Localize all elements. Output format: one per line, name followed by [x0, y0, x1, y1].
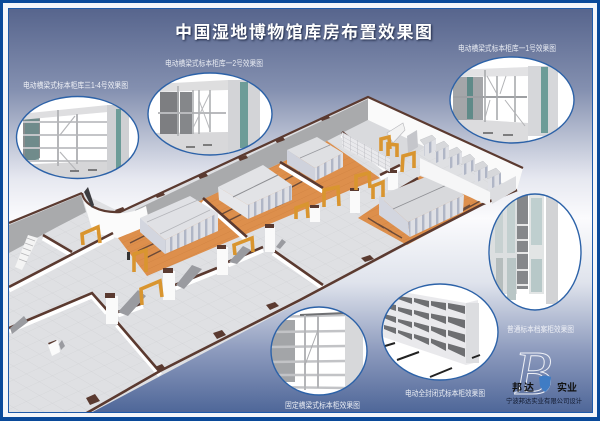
floor rails: [130, 172, 482, 258]
storage block 4: [379, 174, 464, 237]
callout: cabinet library 1: [450, 57, 574, 145]
storage block 2: [218, 165, 292, 219]
logo company name: 邦达: [512, 381, 536, 394]
doors: [82, 137, 414, 305]
logo designer line: 宁波邦达实业有限公司设计: [506, 396, 583, 405]
person: [127, 252, 130, 260]
pillar shadows: [10, 239, 286, 350]
caption: archive cabinet: 普通标本档案柜效果图: [507, 324, 574, 334]
caption: fixed cabinet: 固定横梁式标本柜效果图: [285, 400, 360, 410]
right white wall: [368, 97, 523, 190]
orange rooms floor: [118, 141, 380, 276]
storage block 1: [140, 196, 218, 254]
interior walls: [9, 132, 418, 375]
logo company type: 实业: [557, 381, 577, 394]
logo shield: [539, 376, 551, 392]
logo: [506, 340, 583, 408]
caption: cabinet 2: 电动横梁式标本柜库一2号效果图: [165, 58, 263, 68]
rear room floor: [344, 120, 384, 132]
title: 中国湿地博物馆库房布置效果图: [175, 22, 432, 42]
orange room four floor: [358, 176, 483, 245]
caption: cabinet 1: 电动横梁式标本柜库一1号效果图: [458, 43, 556, 53]
pillars: [105, 170, 398, 324]
floor: [9, 97, 523, 416]
callout: sealed cabinet: [380, 284, 498, 380]
logo script letter: B: [514, 340, 552, 408]
floor plan: [9, 97, 523, 416]
callout: cabinet library 2: [148, 73, 272, 156]
wall tops: [9, 97, 523, 223]
callout: fixed cabinet: [271, 307, 367, 395]
callout: cabinet library 3: [10, 96, 138, 182]
left grey wall: [9, 195, 86, 253]
rear grey wall: [135, 99, 368, 214]
rear room shelves: [387, 123, 516, 206]
storage block 3: [287, 137, 343, 181]
wall stubs: [48, 255, 374, 405]
long rack: [342, 132, 390, 172]
left stair rack: [15, 235, 38, 270]
curved white wall: [84, 200, 148, 238]
caption: sealed cabinet: 电动全封闭式标本柜效果图: [405, 388, 485, 398]
callout: archive cabinet: [489, 194, 581, 310]
caption: cabinet 3: 电动横梁式标本柜库三1-4号效果图: [23, 80, 128, 90]
front outer wall: [85, 190, 517, 414]
